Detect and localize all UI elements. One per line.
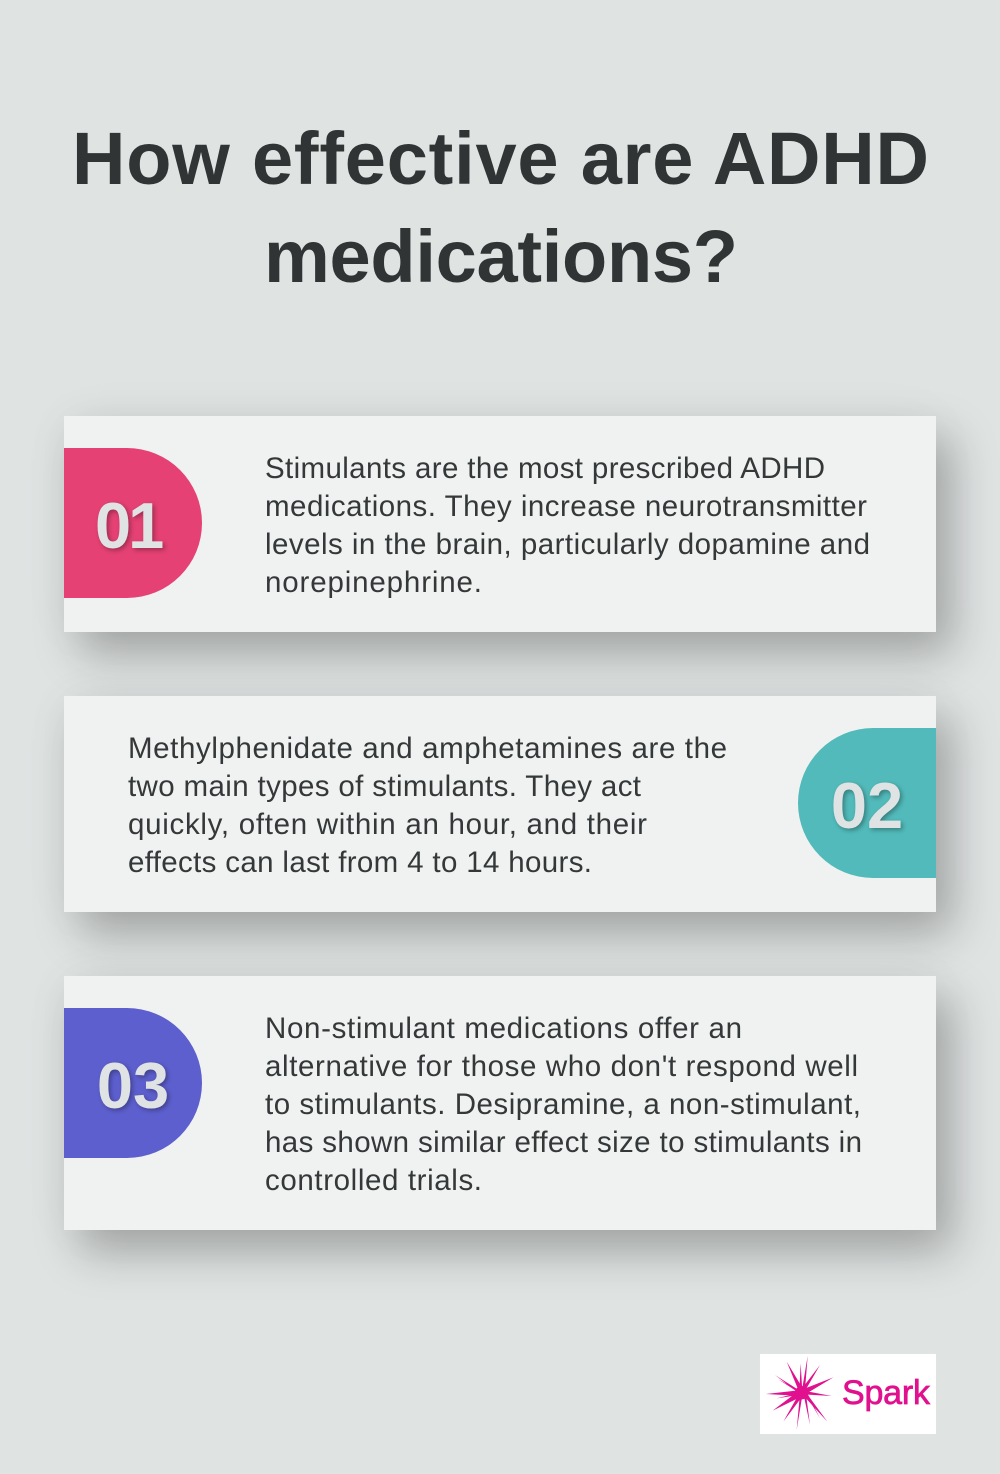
- text: stimulants description: Stimulants are the most prescribed ADHD: [265, 452, 825, 485]
- panel: non-stimulants: [64, 976, 936, 1230]
- badge: 03: [64, 1008, 202, 1158]
- title: medications?: [264, 215, 738, 298]
- badge: 02: [798, 728, 936, 878]
- badge: 02: 02: [831, 769, 903, 842]
- text: stimulants description: [265, 452, 870, 599]
- text: non-stimulants description: to stimulants. Desipramine, a non-stimulant,: [265, 1088, 861, 1121]
- icon: starburst: [766, 1356, 833, 1430]
- text: stimulants description: medications. They increase neurotransmitter: [265, 490, 867, 523]
- text: stimulants description: norepinephrine.: [265, 566, 482, 599]
- title: How effective are ADHD: [72, 117, 929, 200]
- text: non-stimulants description: alternative for those who don't respond well: [265, 1050, 858, 1083]
- text: non-stimulants description: controlled trials.: [265, 1164, 482, 1197]
- text: non-stimulants description: Non-stimulant medications offer an: [265, 1012, 742, 1045]
- badge: 01: [64, 448, 202, 598]
- text: stimulant types description: Methylphenidate and amphetamines are the: [128, 732, 727, 765]
- text: non-stimulants description: has shown similar effect size to stimulants in: [265, 1126, 862, 1159]
- wordmark: Spark: [842, 1374, 931, 1412]
- panel: stimulant types: [64, 696, 936, 912]
- text: stimulant types description: quickly, often within an hour, and their: [128, 808, 647, 841]
- text: stimulant types description: effects can last from 4 to 14 hours.: [128, 846, 592, 879]
- panel: stimulants: [64, 416, 936, 632]
- badge: 01: 01: [95, 489, 161, 562]
- badge: 03: 03: [97, 1049, 169, 1122]
- text: stimulant types description: [128, 732, 727, 879]
- text: non-stimulants description: [265, 1012, 862, 1197]
- title: [72, 117, 929, 298]
- text: stimulant types description: two main types of stimulants. They act: [128, 770, 641, 803]
- logo: Spark: [760, 1354, 936, 1434]
- text: stimulants description: levels in the brain, particularly dopamine and: [265, 528, 870, 561]
